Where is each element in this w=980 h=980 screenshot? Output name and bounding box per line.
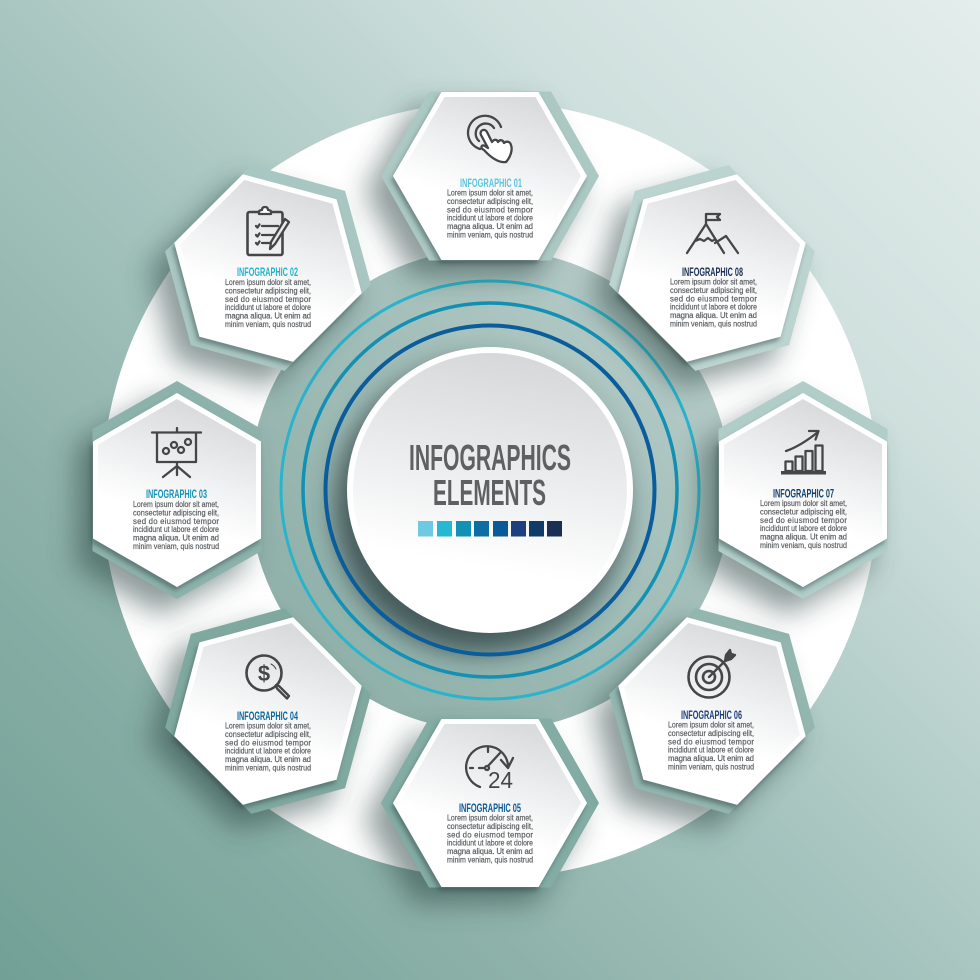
icon: presentation board bbox=[152, 428, 201, 477]
text: infographic 03: magna aliqua. Ut enim ad bbox=[133, 534, 219, 543]
icon: pointer touch bbox=[468, 116, 512, 162]
text: infographic 01: incididunt ut labore et dolore bbox=[447, 214, 533, 223]
icon: dollar magnifier bbox=[246, 656, 289, 698]
text: infographic 03: sed do eiusmod tempor bbox=[133, 517, 219, 526]
text: infographic 05: minim veniam, quis nostrud bbox=[447, 856, 533, 864]
text: infographic 04: incididunt ut labore et dolore bbox=[225, 747, 311, 756]
text: infographic 04: INFOGRAPHIC 04 bbox=[237, 709, 298, 723]
middle ring bbox=[303, 303, 677, 677]
text: infographic 06: Lorem ipsum dolor sit amet, bbox=[668, 720, 754, 730]
text: infographic 06: minim veniam, quis nostrud bbox=[668, 762, 754, 772]
outer ring bbox=[281, 281, 699, 699]
text: infographic 01: sed do eiusmod tempor bbox=[447, 205, 533, 214]
text: infographic 07: minim veniam, quis nostrud bbox=[760, 541, 847, 550]
text: infographic 05 bbox=[447, 801, 533, 864]
text: infographic 06: consectetur adipiscing elit, bbox=[668, 729, 754, 738]
text: infographic 04: minim veniam, quis nostrud bbox=[225, 764, 311, 772]
text: infographic 01: consectetur adipiscing elit, bbox=[447, 197, 533, 206]
panel: infographic 06 bbox=[559, 574, 849, 864]
text: infographic 08: consectetur adipiscing elit, bbox=[670, 286, 757, 295]
text: infographic 01: magna aliqua. Ut enim ad bbox=[447, 222, 533, 231]
text: infographic 07: consectetur adipiscing elit, bbox=[760, 507, 847, 516]
panel: infographic 02 bbox=[115, 131, 405, 421]
text: infographic 03: INFOGRAPHIC 03 bbox=[146, 487, 207, 501]
icon: target with arrow bbox=[688, 650, 735, 698]
text: infographic 08: magna aliqua. Ut enim ad bbox=[670, 311, 757, 320]
panel: infographic 05 bbox=[365, 718, 599, 904]
text: infographic 01: INFOGRAPHIC 01 bbox=[460, 176, 522, 190]
panel: infographic 04 bbox=[115, 574, 405, 864]
text: infographic 01: Lorem ipsum dolor sit amet, bbox=[447, 188, 533, 198]
text: infographic 05: incididunt ut labore et dolore bbox=[447, 839, 533, 848]
text: infographic 08: Lorem ipsum dolor sit amet, bbox=[670, 278, 757, 286]
text: infographic 05: consectetur adipiscing elit, bbox=[447, 822, 533, 831]
text: infographic 03: Lorem ipsum dolor sit amet, bbox=[133, 500, 219, 509]
text: infographic 07: magna aliqua. Ut enim ad bbox=[760, 533, 847, 542]
panel: infographic 01 bbox=[365, 92, 599, 276]
icon: 24 hour clock bbox=[466, 746, 513, 793]
text: infographic 08: sed do eiusmod tempor bbox=[670, 294, 757, 303]
center disc face bbox=[353, 353, 627, 627]
text: infographic 08 bbox=[670, 265, 757, 328]
text: infographic 03: incididunt ut labore et dolore bbox=[133, 525, 219, 534]
text: infographic 06: INFOGRAPHIC 06 bbox=[681, 708, 742, 722]
text: infographic 02: INFOGRAPHIC 02 bbox=[237, 265, 298, 279]
text: infographic 03 bbox=[133, 487, 219, 551]
text: infographic 02 bbox=[225, 265, 311, 329]
text: infographic 06 bbox=[668, 708, 754, 772]
text: infographic 04: sed do eiusmod tempor bbox=[225, 738, 311, 747]
text: infographic 02: Lorem ipsum dolor sit amet, bbox=[225, 278, 311, 287]
text: infographic 08: minim veniam, quis nostrud bbox=[670, 320, 757, 328]
text: infographic 07: incididunt ut labore et dolore bbox=[760, 524, 847, 533]
text: infographic 02: sed do eiusmod tempor bbox=[225, 295, 311, 304]
text: infographic 02: minim veniam, quis nostrud bbox=[225, 320, 311, 329]
text: infographic 07: INFOGRAPHIC 07 bbox=[773, 486, 834, 500]
panel: infographic 08 bbox=[559, 131, 849, 421]
text: infographic 08: INFOGRAPHIC 08 bbox=[682, 265, 743, 279]
text: infographic 02: consectetur adipiscing elit, bbox=[225, 286, 311, 295]
text: infographic 02: incididunt ut labore et dolore bbox=[225, 303, 311, 312]
icon: dollar magnifier: $ bbox=[258, 661, 270, 686]
white outer ring bbox=[102, 102, 878, 878]
icon: clipboard bbox=[248, 207, 289, 255]
text: infographic 05: sed do eiusmod tempor bbox=[447, 830, 533, 839]
icon: growth chart bbox=[781, 431, 826, 474]
icon: 24 hour clock: 24 bbox=[488, 767, 513, 793]
text: infographic 04: Lorem ipsum dolor sit amet, bbox=[225, 722, 311, 730]
inner hole tint bbox=[249, 249, 731, 731]
panel: center circle with rings bbox=[249, 249, 731, 731]
text: infographic 07: Lorem ipsum dolor sit amet, bbox=[760, 499, 847, 508]
title: INFOGRAPHICS bbox=[409, 437, 571, 478]
text: infographic 03: consectetur adipiscing elit, bbox=[133, 508, 219, 517]
text: infographic 01: minim veniam, quis nostrud bbox=[447, 230, 533, 240]
text: infographic 01 bbox=[447, 176, 533, 240]
text: infographic 04: consectetur adipiscing elit, bbox=[225, 730, 311, 739]
text: infographic 06: sed do eiusmod tempor bbox=[668, 737, 754, 746]
center circle shadow bbox=[334, 362, 626, 654]
text: infographic 07: sed do eiusmod tempor bbox=[760, 516, 847, 525]
title bbox=[409, 437, 571, 513]
text: infographic 04 bbox=[225, 709, 311, 772]
colour swatches bbox=[418, 521, 562, 536]
title: ELEMENTS bbox=[433, 472, 546, 513]
text: infographic 07 bbox=[760, 486, 847, 550]
panel: infographic 07 bbox=[702, 381, 888, 615]
text: infographic 02: magna aliqua. Ut enim ad bbox=[225, 312, 311, 321]
icon: mountain flag bbox=[687, 214, 738, 253]
center disc rim bbox=[347, 347, 633, 633]
panel: infographic 03 bbox=[76, 381, 262, 615]
text: infographic 04: magna aliqua. Ut enim ad bbox=[225, 755, 311, 764]
text: infographic 05: INFOGRAPHIC 05 bbox=[459, 801, 521, 815]
text: infographic 06: incididunt ut labore et dolore bbox=[668, 746, 754, 755]
text: infographic 05: magna aliqua. Ut enim ad bbox=[447, 847, 533, 856]
text: infographic 05: Lorem ipsum dolor sit amet, bbox=[447, 814, 533, 822]
inner ring bbox=[326, 326, 654, 654]
text: infographic 03: minim veniam, quis nostrud bbox=[133, 542, 219, 551]
text: infographic 06: magna aliqua. Ut enim ad bbox=[668, 754, 754, 763]
text: infographic 08: incididunt ut labore et dolore bbox=[670, 303, 757, 312]
